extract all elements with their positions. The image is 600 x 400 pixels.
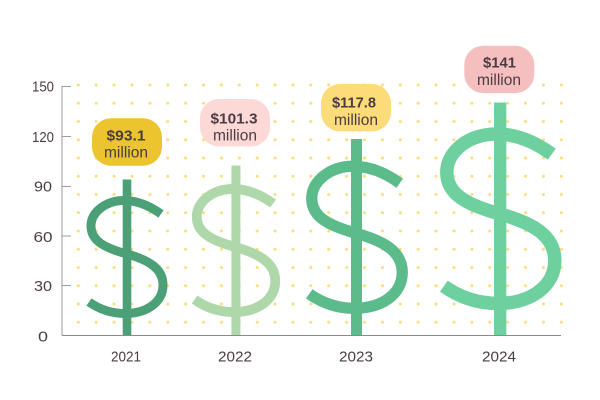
dollar sign: 2022 [195, 166, 275, 336]
y axis labels: 60 [34, 229, 52, 246]
callout: 2024 value [464, 46, 534, 93]
y axis labels: 0 [38, 328, 48, 346]
dollar sign: 2024 [444, 102, 555, 336]
y axis labels: 90 [34, 179, 52, 196]
dollar sign: 2021 [89, 180, 163, 336]
callout: 2023 value: million [334, 112, 378, 129]
y axis labels: 150 [32, 78, 54, 96]
callout: 2021 value: million [104, 144, 148, 161]
callout: 2023 value [321, 84, 391, 131]
y axis labels [32, 78, 54, 346]
x axis labels: 2022 [218, 348, 252, 366]
x axis labels: 2023 [339, 348, 373, 366]
callout: 2024 value: $141 [483, 55, 516, 72]
callout: 2021 value [92, 118, 162, 166]
callout: 2022 value: $101.3 [210, 110, 258, 127]
y axis labels: 30 [34, 278, 52, 295]
callout: 2023 value: $117.8 [332, 95, 376, 112]
y axis [62, 86, 71, 336]
x axis [62, 334, 561, 336]
y axis labels: 120 [32, 129, 54, 146]
callout: 2024 value: million [477, 72, 521, 89]
callout: 2022 value [200, 99, 270, 146]
callout: 2022 value: million [213, 128, 257, 145]
dollar sign: 2023 [309, 139, 402, 336]
x axis labels: 2021 [111, 348, 141, 366]
x axis labels [111, 348, 516, 366]
callout: 2021 value: $93.1 [106, 127, 146, 144]
x axis labels: 2024 [482, 348, 516, 366]
